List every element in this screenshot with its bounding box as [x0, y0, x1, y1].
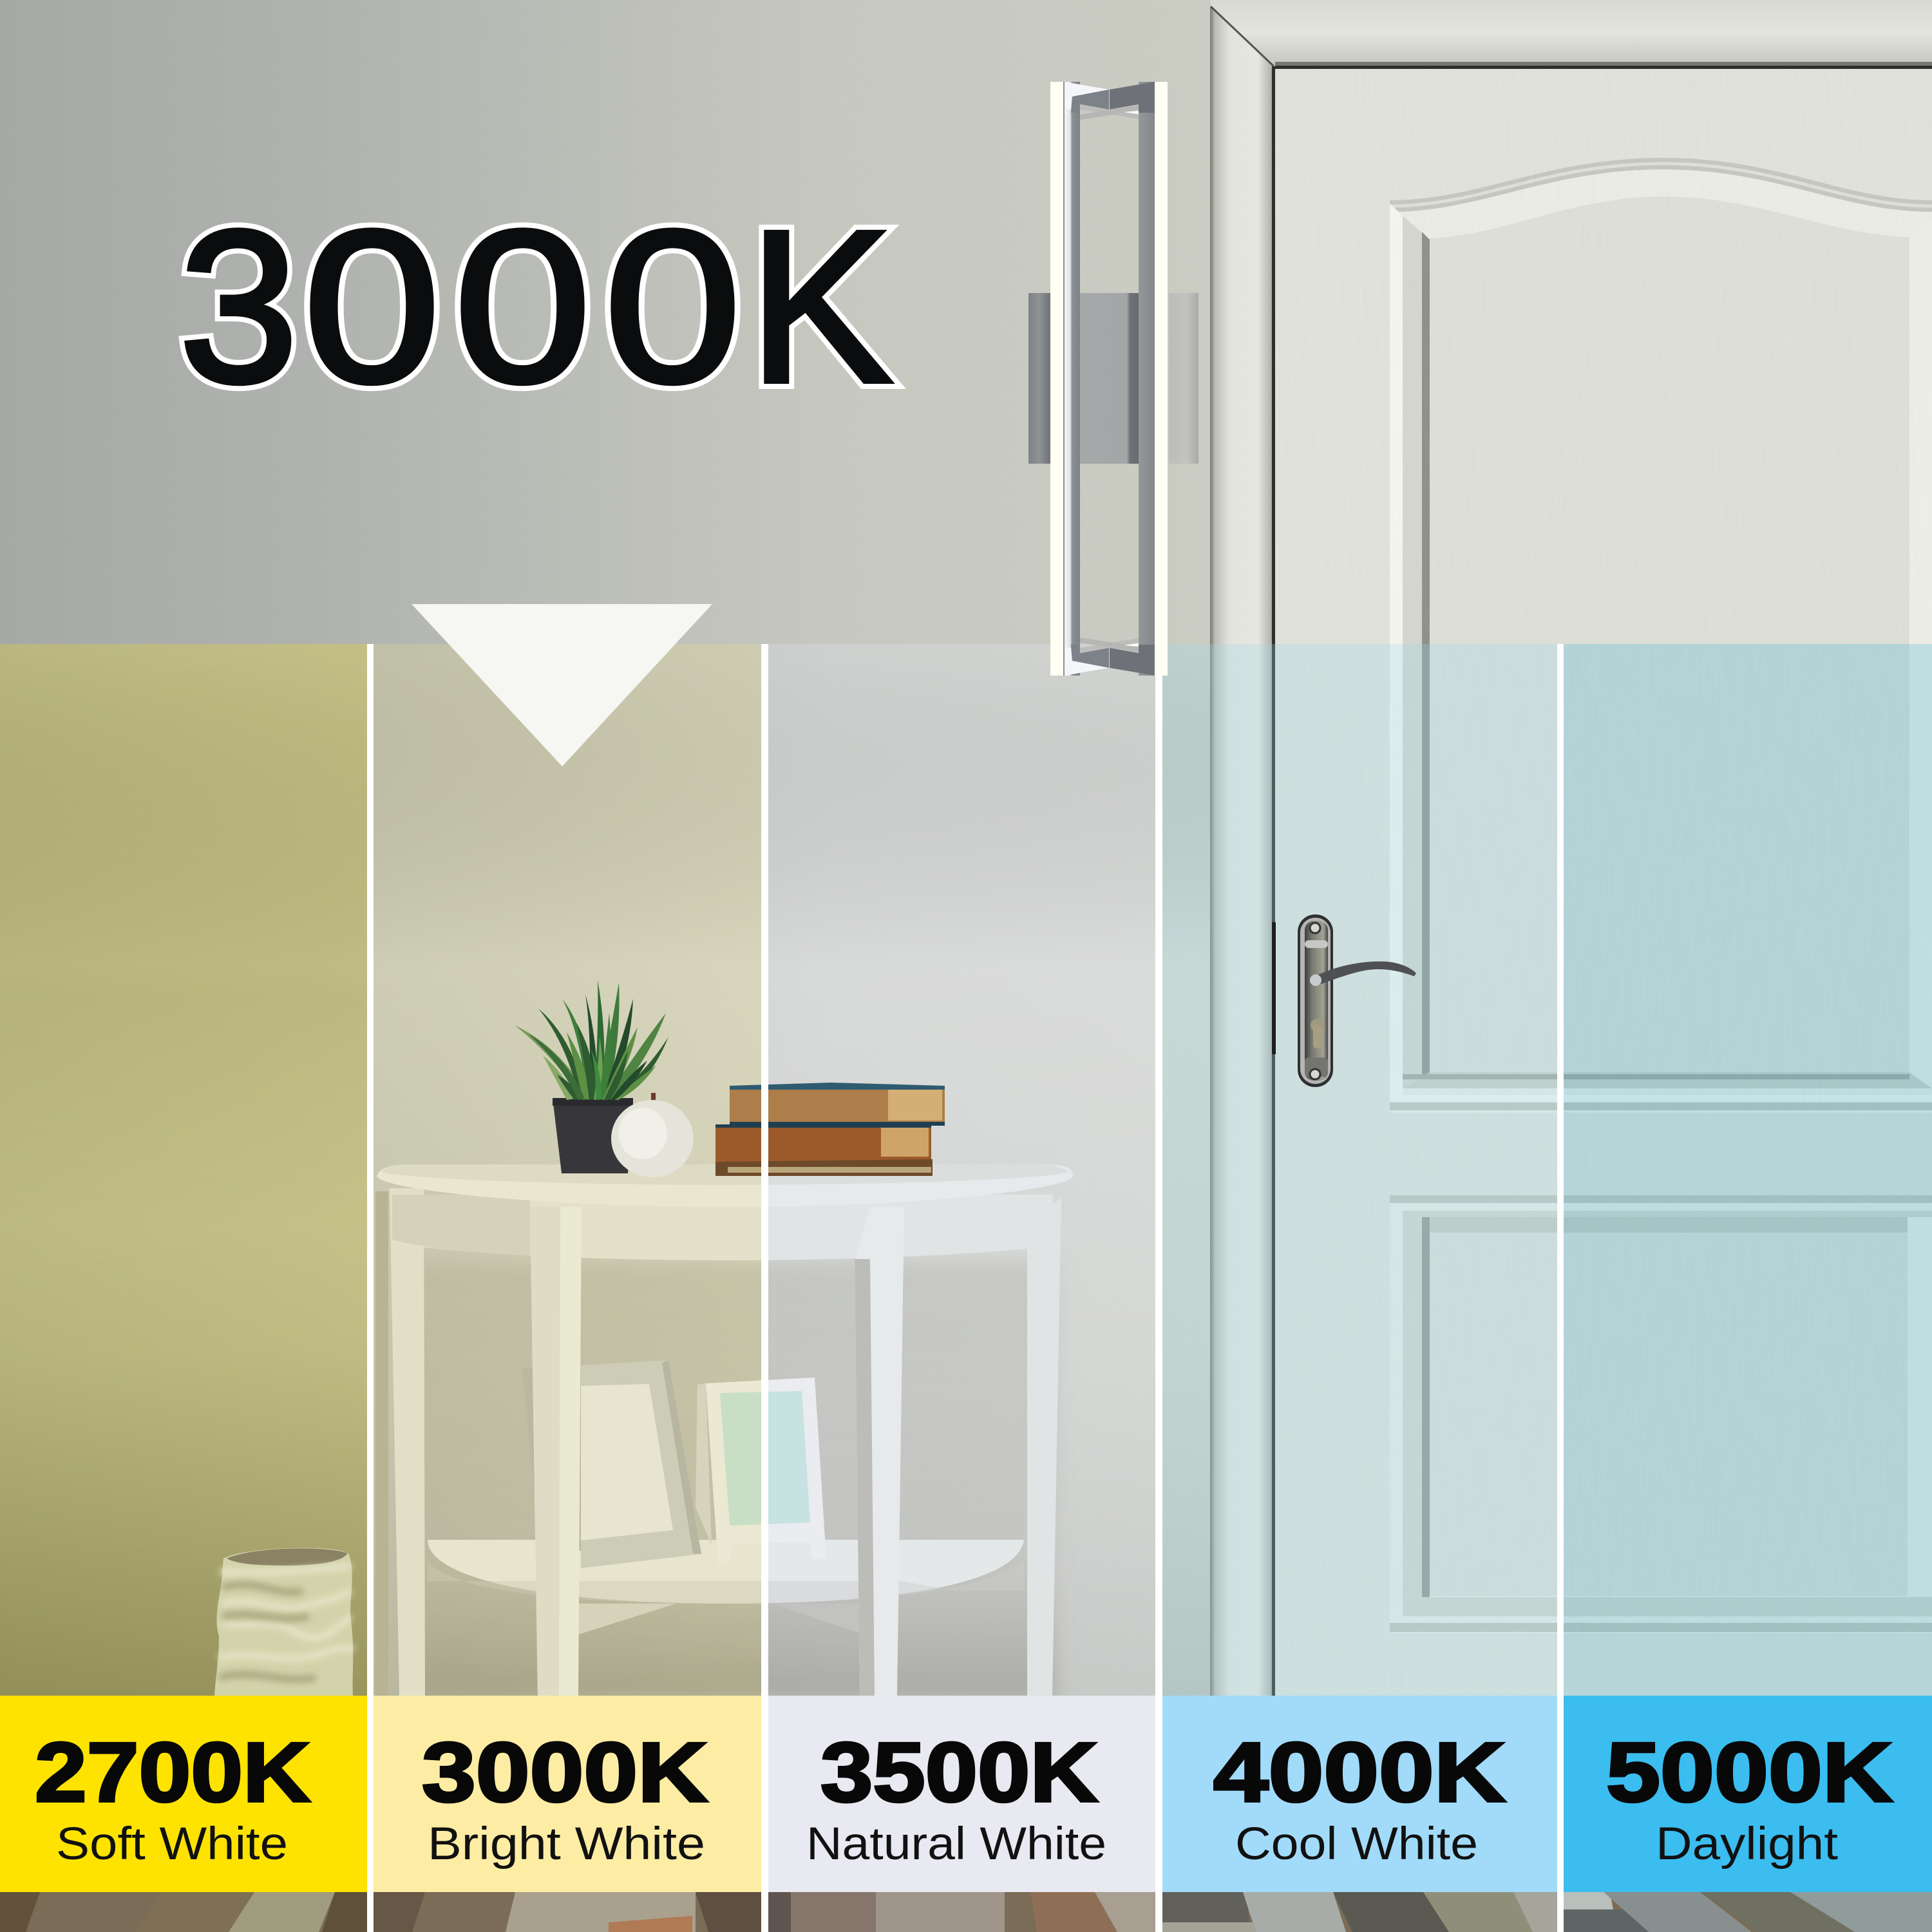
heading: 3000K: 0 — [604, 186, 741, 428]
door leaf with panels — [1275, 69, 1932, 1696]
table top — [377, 1164, 1073, 1207]
swatch: 2700K Soft White — [0, 1696, 367, 1892]
swatch: 2700K Soft White: 2700K — [35, 1725, 310, 1819]
back left leg — [390, 1188, 425, 1696]
wood floor — [0, 1892, 1932, 1932]
wall background — [0, 0, 1288, 1932]
door handle — [1272, 914, 1416, 1087]
swatch: 5000K Daylight — [1564, 1696, 1932, 1892]
swatch: 3000K Bright White — [374, 1696, 761, 1892]
swatch: 3500K Natural White — [768, 1696, 1155, 1892]
door casing — [1210, 0, 1932, 1696]
swatch: 4000K Cool White: 4000K — [1213, 1725, 1506, 1819]
plant leaves — [515, 980, 668, 1100]
heading: 3000K: 0 — [604, 186, 741, 428]
swatch: 3500K Natural White: Natural White — [806, 1819, 1106, 1870]
heading: 3000K: 0 — [454, 186, 591, 428]
plant pot — [553, 1098, 633, 1173]
frame leaning — [522, 1360, 701, 1568]
column dividers — [367, 644, 1564, 1932]
front right leg — [855, 1207, 904, 1696]
front left leg — [530, 1207, 582, 1696]
console table — [375, 1164, 1073, 1696]
back right leg — [1027, 1198, 1061, 1696]
heading: 3000K: 0 — [303, 186, 440, 428]
door grain — [1275, 69, 1932, 1696]
small glass frame — [696, 1378, 826, 1564]
swatch: 5000K Daylight: Daylight — [1656, 1819, 1838, 1870]
heading: 3000K: 3 — [179, 186, 298, 428]
backplate — [1028, 293, 1050, 464]
swatch: 4000K Cool White — [1162, 1696, 1557, 1892]
wall sconce lamp — [1028, 82, 1198, 676]
heading: 3000K: 3 — [179, 186, 298, 428]
colour temperature tints — [0, 644, 1932, 1696]
swatch: 4000K Cool White: Cool White — [1235, 1819, 1478, 1870]
heading: 3000K: K — [749, 186, 892, 428]
lower door panel — [1390, 1195, 1932, 1633]
swatch: 5000K Daylight: 5000K — [1606, 1725, 1893, 1819]
pointer triangle — [412, 604, 712, 766]
heading: 3000K: 0 — [303, 186, 440, 428]
ceramic apple — [611, 1093, 694, 1177]
swatch: 2700K Soft White: Soft White — [56, 1819, 288, 1870]
lower shelf — [428, 1540, 1024, 1634]
stacked books — [715, 1083, 945, 1176]
decorative vase — [214, 1548, 354, 1696]
heading: 3000K: 0 — [454, 186, 591, 428]
apron — [392, 1195, 1053, 1260]
bottom wedge — [1065, 638, 1155, 676]
light bars — [1050, 82, 1063, 676]
heading: 3000K — [179, 186, 892, 428]
top wedge — [1065, 82, 1155, 120]
swatch: 3000K Bright White: 3000K — [422, 1725, 708, 1819]
frame struts — [1065, 82, 1080, 676]
heading: 3000K: K — [749, 186, 892, 428]
swatch: 3500K Natural White: 3500K — [820, 1725, 1098, 1819]
swatch: 3000K Bright White: Bright White — [428, 1819, 705, 1870]
upper door panel — [1390, 161, 1932, 1113]
